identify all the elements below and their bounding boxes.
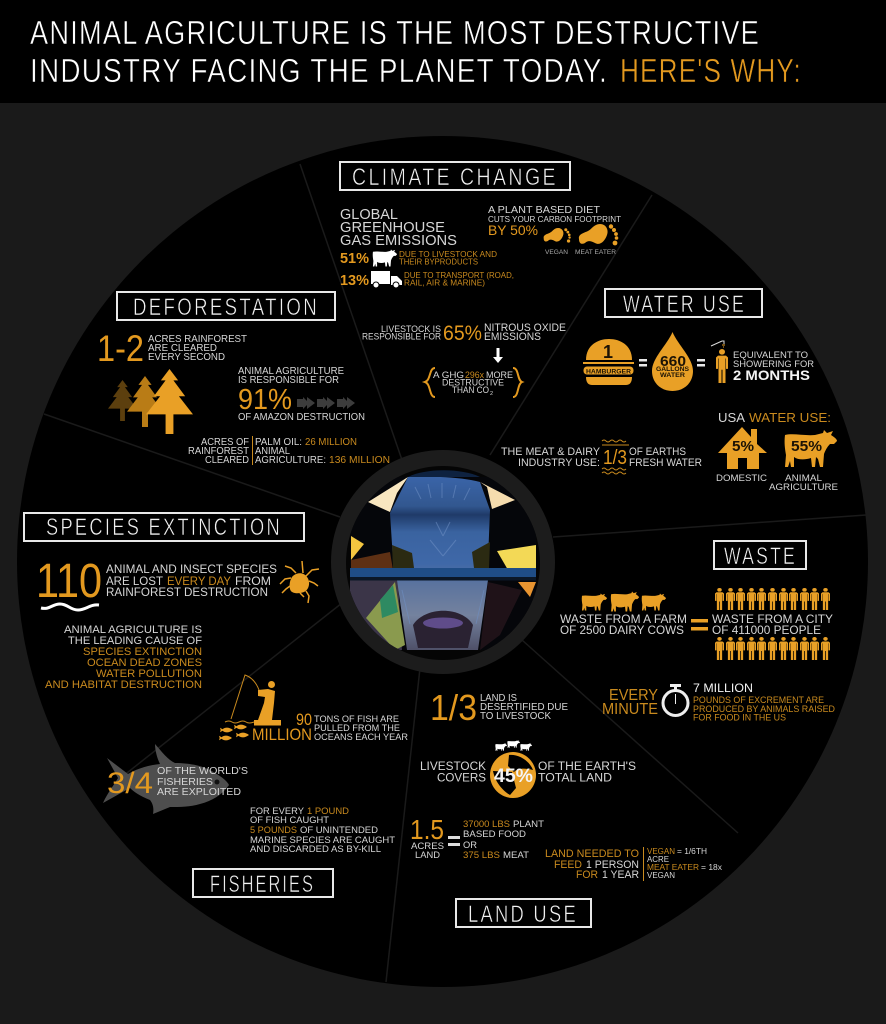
- icon: stopwatch: [663, 684, 688, 716]
- stat: 13 percent transport: 13%: [340, 272, 369, 289]
- text: leading cause: SPECIES EXTINCTION: [83, 646, 202, 658]
- icon: grey arrows: [297, 397, 355, 409]
- text: every minute: EVERY: [609, 687, 658, 704]
- stat: 1-2 acres: [97, 328, 248, 369]
- text: every minute: [602, 687, 658, 718]
- stat: 51 percent livestock: [340, 249, 497, 267]
- stat: 1.5 acres: OR: [463, 840, 477, 851]
- text: 7 million pounds: [693, 681, 835, 724]
- stat: 110 species: 110: [36, 555, 102, 608]
- stat: 51 percent livestock: DUE TO LIVESTOCK AND: [399, 249, 497, 259]
- text: equivalent to showering: SHOWERING FOR: [733, 359, 814, 370]
- heading: usa water use: USA: [718, 410, 745, 425]
- arrow: down: [493, 348, 503, 363]
- stat: 90 million tons: PULLED FROM THE: [314, 723, 400, 734]
- stat: 13 percent transport: [340, 270, 514, 289]
- heading: waste: WASTE: [724, 543, 797, 570]
- stat: nitrous oxide: RESPONSIBLE FOR: [362, 332, 441, 342]
- text: equivalent to showering: [733, 350, 814, 383]
- stat: 91 percent amazon: [238, 365, 365, 423]
- stat: three quarters exploited: [107, 765, 248, 800]
- icon: truck: [371, 271, 402, 288]
- title: HERE'S WHY:: [620, 53, 802, 90]
- text: leading cause: THE LEADING CAUSE OF: [68, 635, 202, 647]
- stat: nitrous oxide: [362, 322, 566, 345]
- stat: land needed to feed: VEGAN: [647, 870, 675, 880]
- equals sign: [639, 359, 647, 366]
- callout: 296x more destructive: 2: [490, 391, 493, 397]
- icon: hamburger: 1: [603, 342, 613, 362]
- stat: land needed to feed: LAND NEEDED TO: [545, 848, 639, 860]
- text: by-kill: OF UNINTENDED: [300, 825, 378, 836]
- icon: vegan footprint: [544, 228, 571, 243]
- icon: three cows: [582, 592, 666, 611]
- stat: 13 percent transport: DUE TO TRANSPORT (ROAD,: [404, 270, 514, 280]
- heading: fisheries: FISHERIES: [210, 871, 315, 898]
- stat: nitrous oxide: EMISSIONS: [484, 331, 541, 343]
- icon: house 5 percent: [716, 427, 767, 484]
- equals sign: [691, 619, 708, 630]
- text: by-kill: [250, 806, 395, 855]
- stat: land needed to feed: FEED: [554, 859, 582, 871]
- text: waste from a city: [712, 614, 833, 637]
- icon: meat eater footprint: [578, 224, 618, 246]
- text: of the earth's total land: OF THE EARTH'S: [538, 761, 636, 773]
- stat: plant based diet footprint: A PLANT BASED DIET: [488, 204, 601, 216]
- heading: fisheries: [193, 869, 333, 898]
- stat: 110 species: [36, 555, 277, 610]
- stat: 110 species: FROM: [235, 576, 271, 588]
- stat: 1.5 acres: [410, 814, 544, 861]
- callout: 296x more destructive: THAN CO: [452, 385, 489, 395]
- icon: water drop 660 gallons: [652, 332, 693, 391]
- stat: land needed to feed: FOR: [576, 869, 598, 881]
- callout: 296x more destructive: [425, 368, 522, 397]
- text: livestock covers: [420, 761, 486, 784]
- icon: insect: [280, 561, 319, 603]
- stat: 91 percent amazon: OF AMAZON DESTRUCTION: [238, 411, 365, 423]
- heading: usa water use: WATER USE:: [749, 410, 831, 425]
- icon: fish silhouette: [103, 744, 229, 814]
- text: of the earth's total land: [538, 761, 636, 784]
- icon: house 5 percent: DOMESTIC: [716, 473, 767, 484]
- heading: deforestation: DEFORESTATION: [133, 294, 319, 321]
- stat: land needed to feed: [545, 846, 723, 881]
- stat: 1-2 acres: EVERY SECOND: [148, 351, 225, 363]
- stat: 1.5 acres: LAND: [415, 850, 440, 861]
- stat: acres cleared: CLEARED: [205, 455, 249, 466]
- text: waste from a city: WASTE FROM A CITY: [712, 614, 833, 626]
- stat: plant based diet footprint: CUTS YOUR CARBON FOOTPRINT: [488, 214, 621, 224]
- icon: white cow: [372, 250, 397, 266]
- stat: acres cleared: RAINFOREST: [188, 446, 249, 457]
- icon: water drop 660 gallons: 660: [660, 353, 686, 370]
- text: 7 million pounds: FOR FOOD IN THE US: [693, 712, 786, 724]
- stat: 110 species: ANIMAL AND INSECT SPECIES: [106, 564, 277, 576]
- panel: fisheries: [103, 675, 408, 898]
- stat: one third fresh water: [501, 440, 702, 474]
- sector dividers: [44, 164, 866, 982]
- stat: 1.5 acres: MEAT: [503, 850, 529, 861]
- title: INDUSTRY FACING THE PLANET TODAY.: [30, 53, 608, 90]
- icon: globe with cows: 45%: [494, 766, 533, 787]
- stat: 1-2 acres: ARE CLEARED: [148, 342, 217, 354]
- text: leading cause: [45, 624, 202, 691]
- heading: species extinction: SPECIES EXTINCTION: [46, 514, 282, 541]
- stat: land needed to feed: 1 PERSON: [586, 859, 639, 871]
- text: waste from a farm: WASTE FROM A FARM: [560, 614, 687, 626]
- text: by-kill: FOR EVERY: [250, 806, 305, 817]
- stat: 91 percent amazon: ANIMAL AGRICULTURE: [238, 365, 344, 377]
- stat: acres cleared: AGRICULTURE:: [255, 455, 326, 466]
- center ring: [331, 450, 555, 674]
- stat: 90 million tons: 90: [296, 710, 312, 729]
- stat: 1-2 acres: ACRES RAINFOREST: [148, 333, 248, 345]
- text: 7 million pounds: PRODUCED BY ANIMALS RAISED: [693, 704, 835, 715]
- stat: one third fresh water: 1/3: [603, 447, 627, 469]
- stat: one third desertified: LAND IS: [480, 693, 517, 704]
- stat: plant based diet footprint: VEGAN: [545, 249, 568, 256]
- stat: plant based diet footprint: MEAT EATER: [575, 249, 616, 256]
- stat: land needed to feed: 1 YEAR: [602, 869, 639, 881]
- stat: three quarters exploited: ARE EXPLOITED: [157, 786, 241, 798]
- stat: three quarters exploited: 3/4: [107, 767, 153, 800]
- icon: house 5 percent: 5%: [732, 438, 754, 455]
- stat: 110 species: EVERY DAY: [167, 576, 231, 588]
- stat: 51 percent livestock: THEIR BYPRODUCTS: [399, 256, 478, 266]
- text: leading cause: AND HABITAT DESTRUCTION: [45, 679, 202, 691]
- stat: 1.5 acres: BASED FOOD: [463, 829, 526, 840]
- panel: climate change: [340, 162, 621, 397]
- stat: three quarters exploited: FISHERIES: [157, 776, 213, 788]
- icon: cow 55 percent: AGRICULTURE: [769, 482, 838, 493]
- text: waste from a farm: OF 2500 DAIRY COWS: [560, 625, 684, 637]
- stat: nitrous oxide: 65%: [443, 322, 482, 345]
- stat: plant based diet footprint: BY 50%: [488, 222, 538, 238]
- text: every minute: MINUTE: [602, 701, 658, 718]
- stat: one third fresh water: THE MEAT & DAIRY: [501, 446, 601, 458]
- text: livestock covers: LIVESTOCK: [420, 761, 486, 773]
- text: by-kill: 1 POUND: [307, 806, 349, 817]
- icon: person in shower: [711, 341, 728, 383]
- stat: acres cleared: PALM OIL:: [255, 437, 302, 448]
- text: livestock covers: COVERS: [437, 772, 486, 784]
- stat: 1.5 acres: 1.5: [410, 814, 444, 845]
- icon: water drop 660 gallons: GALLONS: [656, 366, 690, 373]
- stat: 1-2 acres: 1-2: [97, 328, 144, 369]
- panel: species extinction: [24, 513, 319, 691]
- equals sign: [697, 359, 705, 366]
- stat: 91 percent amazon: IS RESPONSIBLE FOR: [238, 374, 339, 386]
- stat: one third desertified: DESERTIFIED DUE: [480, 702, 568, 713]
- stat: acres cleared: ANIMAL: [255, 446, 290, 457]
- stat: 90 million tons: MILLION: [252, 726, 312, 744]
- text: global greenhouse gas emissions: [340, 207, 457, 249]
- text: 7 million pounds: POUNDS OF EXCREMENT ARE: [693, 695, 824, 706]
- panel: water use: [501, 289, 838, 493]
- center photo: cow behind a rail: [340, 466, 550, 660]
- stat: land needed to feed: = 18x: [701, 862, 723, 872]
- wave: [41, 604, 99, 610]
- icon: people row bottom: [715, 637, 830, 660]
- stat: land needed to feed: = 1/6TH: [677, 846, 707, 856]
- stat: 1.5 acres: ACRES: [411, 841, 444, 852]
- text: by-kill: AND DISCARDED AS BY-KILL: [250, 844, 381, 855]
- icon: globe with cows: [490, 740, 536, 798]
- panel: waste: [560, 541, 835, 724]
- stat: 110 species: RAINFOREST DESTRUCTION: [106, 587, 268, 599]
- stat: one third desertified: TO LIVESTOCK: [480, 711, 551, 722]
- stat: 90 million tons: OCEANS EACH YEAR: [314, 732, 408, 743]
- stat: nitrous oxide: NITROUS OXIDE: [484, 322, 566, 334]
- icon: water drop 660 gallons: WATER: [660, 372, 685, 379]
- icon: cow 55 percent: [769, 430, 838, 493]
- stat: one third fresh water: INDUSTRY USE:: [518, 457, 600, 469]
- heading: climate change: CLIMATE CHANGE: [352, 164, 558, 191]
- icon: hamburger: HAMBURGER: [586, 368, 631, 376]
- stat: 1.5 acres: 375 LBS: [463, 850, 500, 861]
- icon: hamburger: [583, 339, 634, 385]
- icon: people row top: [715, 588, 830, 610]
- callout: 296x more destructive: 296x: [465, 370, 484, 380]
- icon: fisherman: [219, 675, 281, 740]
- stat: land needed to feed: VEGAN: [647, 846, 675, 856]
- stat: 51 percent livestock: 51%: [340, 250, 369, 267]
- text: equivalent to showering: EQUIVALENT TO: [733, 350, 808, 361]
- text: by-kill: MARINE SPECIES ARE CAUGHT: [250, 835, 395, 846]
- stat: 90 million tons: [252, 710, 408, 744]
- stat: 1.5 acres: PLANT: [513, 819, 544, 830]
- stat: land needed to feed: ACRE: [647, 854, 669, 864]
- text: 7 million pounds: 7 MILLION: [693, 681, 753, 695]
- text: waste from a city: OF 411000 PEOPLE: [712, 625, 821, 637]
- text: waste from a farm: [560, 614, 687, 637]
- text: by-kill: 5 POUNDS: [250, 825, 297, 836]
- stat: acres cleared: ACRES OF: [201, 437, 249, 448]
- stat: 110 species: ARE LOST: [106, 576, 163, 588]
- icon: cow 55 percent: ANIMAL: [785, 473, 822, 484]
- callout: 296x more destructive: A GHG: [433, 370, 464, 380]
- icon: cow 55 percent: 55%: [791, 438, 822, 455]
- text: of the earth's total land: TOTAL LAND: [538, 772, 612, 784]
- icon: trees: [108, 369, 193, 434]
- panel: land use: [410, 687, 723, 928]
- stat: one third desertified: [430, 687, 568, 728]
- text: leading cause: WATER POLLUTION: [96, 668, 202, 680]
- stat: acres cleared: 136 MILLION: [329, 455, 390, 466]
- text: global greenhouse gas emissions: GLOBAL: [340, 207, 398, 223]
- stat: 90 million tons: TONS OF FISH ARE: [314, 714, 399, 725]
- text: global greenhouse gas emissions: GREENHOUSE: [340, 220, 445, 236]
- text: global greenhouse gas emissions: GAS EMISSIONS: [340, 233, 457, 249]
- stat: 13 percent transport: RAIL, AIR & MARINE): [404, 278, 485, 288]
- heading: land use: LAND USE: [468, 901, 578, 928]
- main circle: [17, 136, 868, 987]
- text: leading cause: ANIMAL AGRICULTURE IS: [64, 624, 202, 636]
- stat: 1.5 acres: 37000 LBS: [463, 819, 510, 830]
- callout: 296x more destructive: DESTRUCTIVE: [442, 378, 504, 388]
- stat: nitrous oxide: LIVESTOCK IS: [381, 324, 441, 334]
- text: by-kill: OF FISH CAUGHT: [250, 815, 329, 826]
- stat: three quarters exploited: OF THE WORLD'S: [157, 765, 248, 777]
- stat: one third fresh water: FRESH WATER: [629, 457, 702, 469]
- stat: one third desertified: 1/3: [430, 687, 477, 728]
- stat: acres cleared: [188, 436, 390, 466]
- stat: one third fresh water: OF EARTHS: [629, 446, 686, 458]
- title: [30, 15, 802, 90]
- panel: deforestation: [97, 292, 390, 466]
- icon: water waves: [602, 440, 629, 474]
- stat: plant based diet footprint: [488, 204, 621, 256]
- heading: water use: WATER USE: [623, 291, 746, 318]
- stat: acres cleared: 26 MILLION: [305, 437, 357, 448]
- text: leading cause: OCEAN DEAD ZONES: [87, 657, 202, 669]
- header band: [0, 0, 886, 103]
- stat: land needed to feed: MEAT EATER: [647, 862, 699, 872]
- stat: 91 percent amazon: 91%: [238, 384, 292, 416]
- callout: 296x more destructive: MORE: [486, 370, 513, 380]
- text: equivalent to showering: 2 MONTHS: [733, 367, 810, 383]
